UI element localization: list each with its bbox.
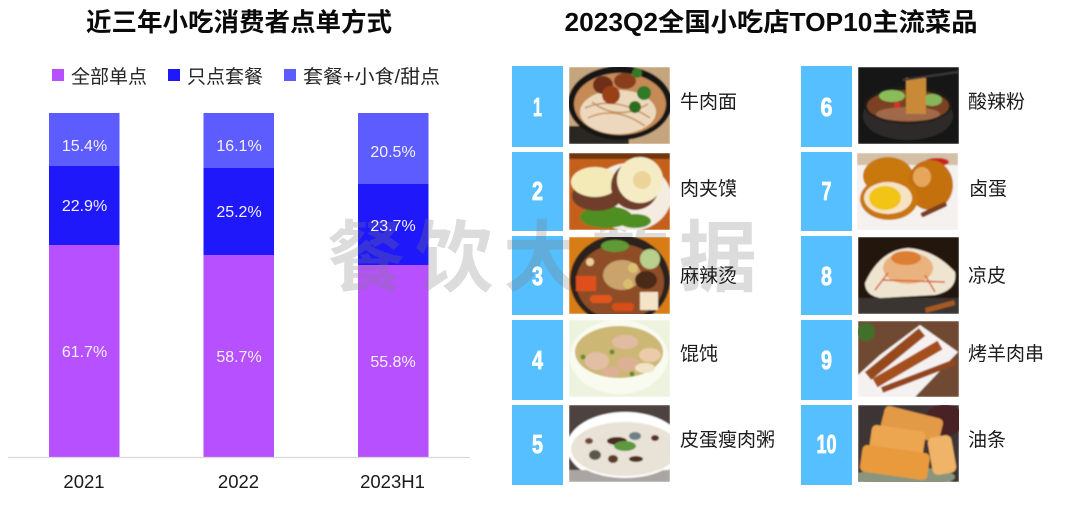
dish names right: 油条 [968, 429, 1006, 451]
food photo: youtiao [858, 405, 959, 482]
rank numbers [532, 92, 836, 459]
rank numbers: 7 [822, 176, 832, 206]
bar value labels: 55.8% [370, 354, 416, 371]
bar value labels: 61.7% [62, 344, 107, 361]
chart legend [52, 66, 440, 88]
x axis labels: 2022 [218, 471, 259, 492]
food photo: hot and sour noodles [858, 67, 959, 144]
food photo: lamb skewers [857, 321, 959, 397]
bar value labels: 22.9% [62, 198, 107, 215]
food photo: braised eggs [857, 153, 958, 230]
dish names right: 卤蛋 [969, 178, 1007, 200]
bar value labels: 23.7% [370, 218, 416, 235]
rank numbers: 9 [821, 345, 832, 375]
rank numbers: 5 [532, 429, 543, 459]
number cells right [801, 66, 852, 485]
rank numbers: 10 [816, 429, 836, 459]
chart legend: 只点套餐 [187, 66, 263, 88]
rank numbers: 2 [532, 176, 543, 206]
rank numbers: 4 [532, 345, 543, 375]
food photo: wonton [569, 320, 670, 397]
dish names left: 麻辣烫 [680, 265, 737, 287]
rank numbers: 3 [532, 261, 543, 291]
food photo: liangpi [858, 237, 959, 314]
dish names left: 皮蛋瘦肉粥 [680, 429, 775, 451]
bar value labels [62, 138, 416, 371]
bar value labels: 20.5% [370, 144, 416, 161]
watermark: 餐饮大数据 [327, 214, 767, 302]
dish names right [968, 91, 1044, 451]
dish names left [680, 91, 775, 451]
dish names right: 烤羊肉串 [968, 343, 1044, 365]
rank numbers: 8 [821, 261, 832, 291]
chart legend: 全部单点 [71, 66, 147, 88]
dish names left: 肉夹馍 [680, 178, 737, 200]
rank numbers: 6 [820, 92, 832, 122]
stacked bar chart [8, 113, 470, 458]
bar: 2023H1 [358, 113, 428, 457]
bar value labels: 58.7% [216, 349, 262, 366]
bar: 2022 [204, 113, 274, 457]
x axis labels: 2023H1 [360, 471, 425, 492]
food photo: malatang [569, 237, 670, 314]
food photo: roujiamo [569, 153, 671, 231]
title: ordering method chart: 近三年小吃消费者点单方式 [86, 8, 392, 37]
number cells left [512, 66, 563, 485]
x axis labels: 2021 [63, 471, 105, 492]
dish names left: 馄饨 [680, 343, 718, 365]
food photo: century egg congee [569, 405, 670, 482]
dish names right: 凉皮 [968, 265, 1006, 287]
bar: 2021 [49, 113, 120, 457]
bar value labels: 15.4% [62, 138, 107, 155]
bar value labels: 25.2% [216, 204, 262, 221]
food photo: beef noodles [568, 66, 672, 144]
dish names left: 牛肉面 [680, 91, 737, 113]
bar value labels: 16.1% [216, 138, 262, 155]
rank numbers: 1 [533, 92, 542, 122]
title: top 10 dishes: 2023Q2全国小吃店TOP10主流菜品 [564, 9, 978, 37]
x axis labels [63, 471, 425, 492]
chart legend: 套餐+小食/甜点 [303, 66, 440, 88]
dish names right: 酸辣粉 [968, 91, 1025, 113]
